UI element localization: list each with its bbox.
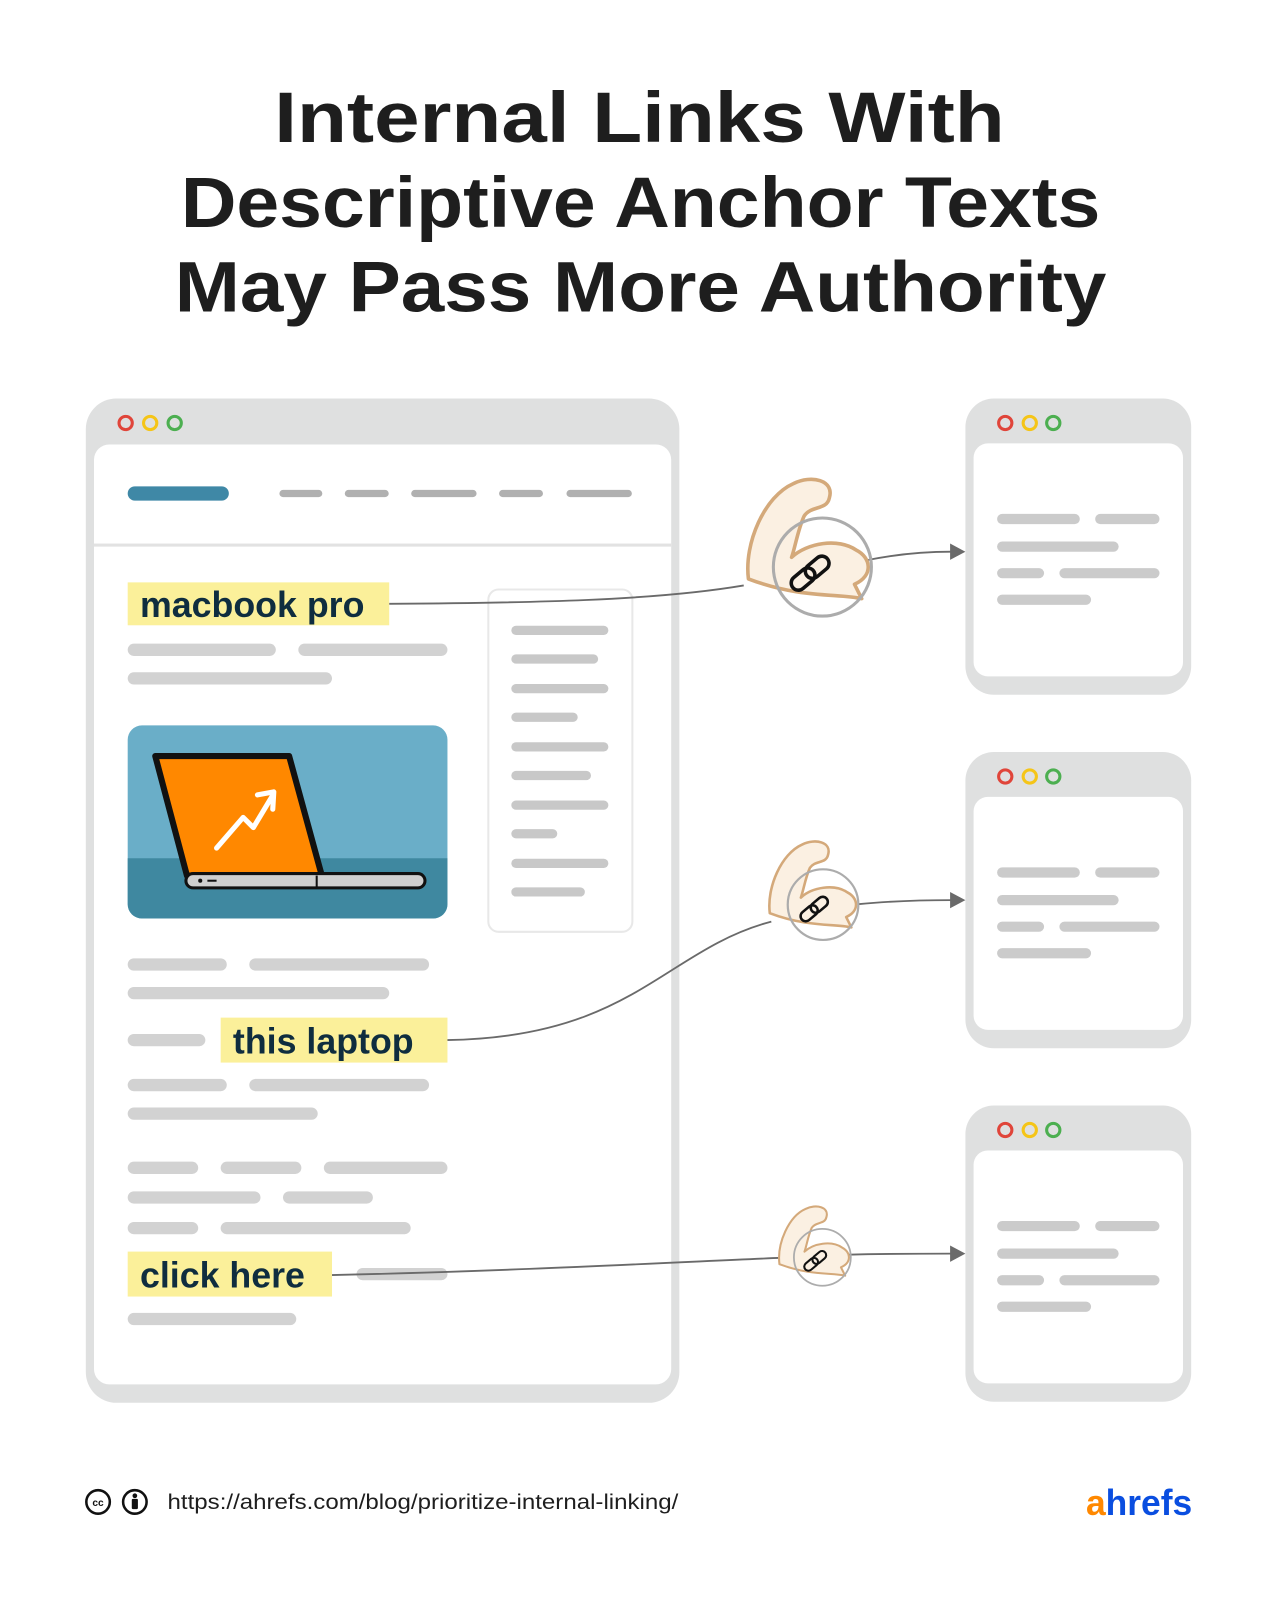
icon: strong arm 3 bbox=[779, 1206, 851, 1286]
anchor: this laptop: this laptop bbox=[233, 1021, 414, 1061]
title bbox=[175, 78, 1107, 328]
panel: target page 1 bbox=[965, 398, 1191, 695]
footer: license and url: cc bbox=[92, 1498, 104, 1509]
text lines bbox=[134, 650, 441, 1319]
sidebar bbox=[488, 590, 632, 932]
footer: license and url: https://ahrefs.com/blog/prioritize-internal-linking/ bbox=[168, 1490, 678, 1514]
arrow: connector lines bbox=[332, 552, 952, 1275]
anchor: click here: click here bbox=[140, 1255, 305, 1295]
icon: strong arm 1 bbox=[748, 479, 871, 616]
anchor: macbook pro: macbook pro bbox=[140, 585, 364, 625]
image: laptop bbox=[128, 725, 447, 919]
icon: strong arm 2 bbox=[769, 841, 858, 940]
panel: main browser page bbox=[86, 398, 679, 1403]
panel: target page 3 bbox=[965, 1105, 1191, 1402]
title: Internal Links With bbox=[274, 78, 1005, 158]
logo: ahrefs: ahrefs bbox=[1086, 1483, 1192, 1523]
title: Descriptive Anchor Texts bbox=[181, 163, 1100, 243]
title: May Pass More Authority bbox=[175, 248, 1107, 328]
panel: target page 2 bbox=[965, 752, 1191, 1048]
